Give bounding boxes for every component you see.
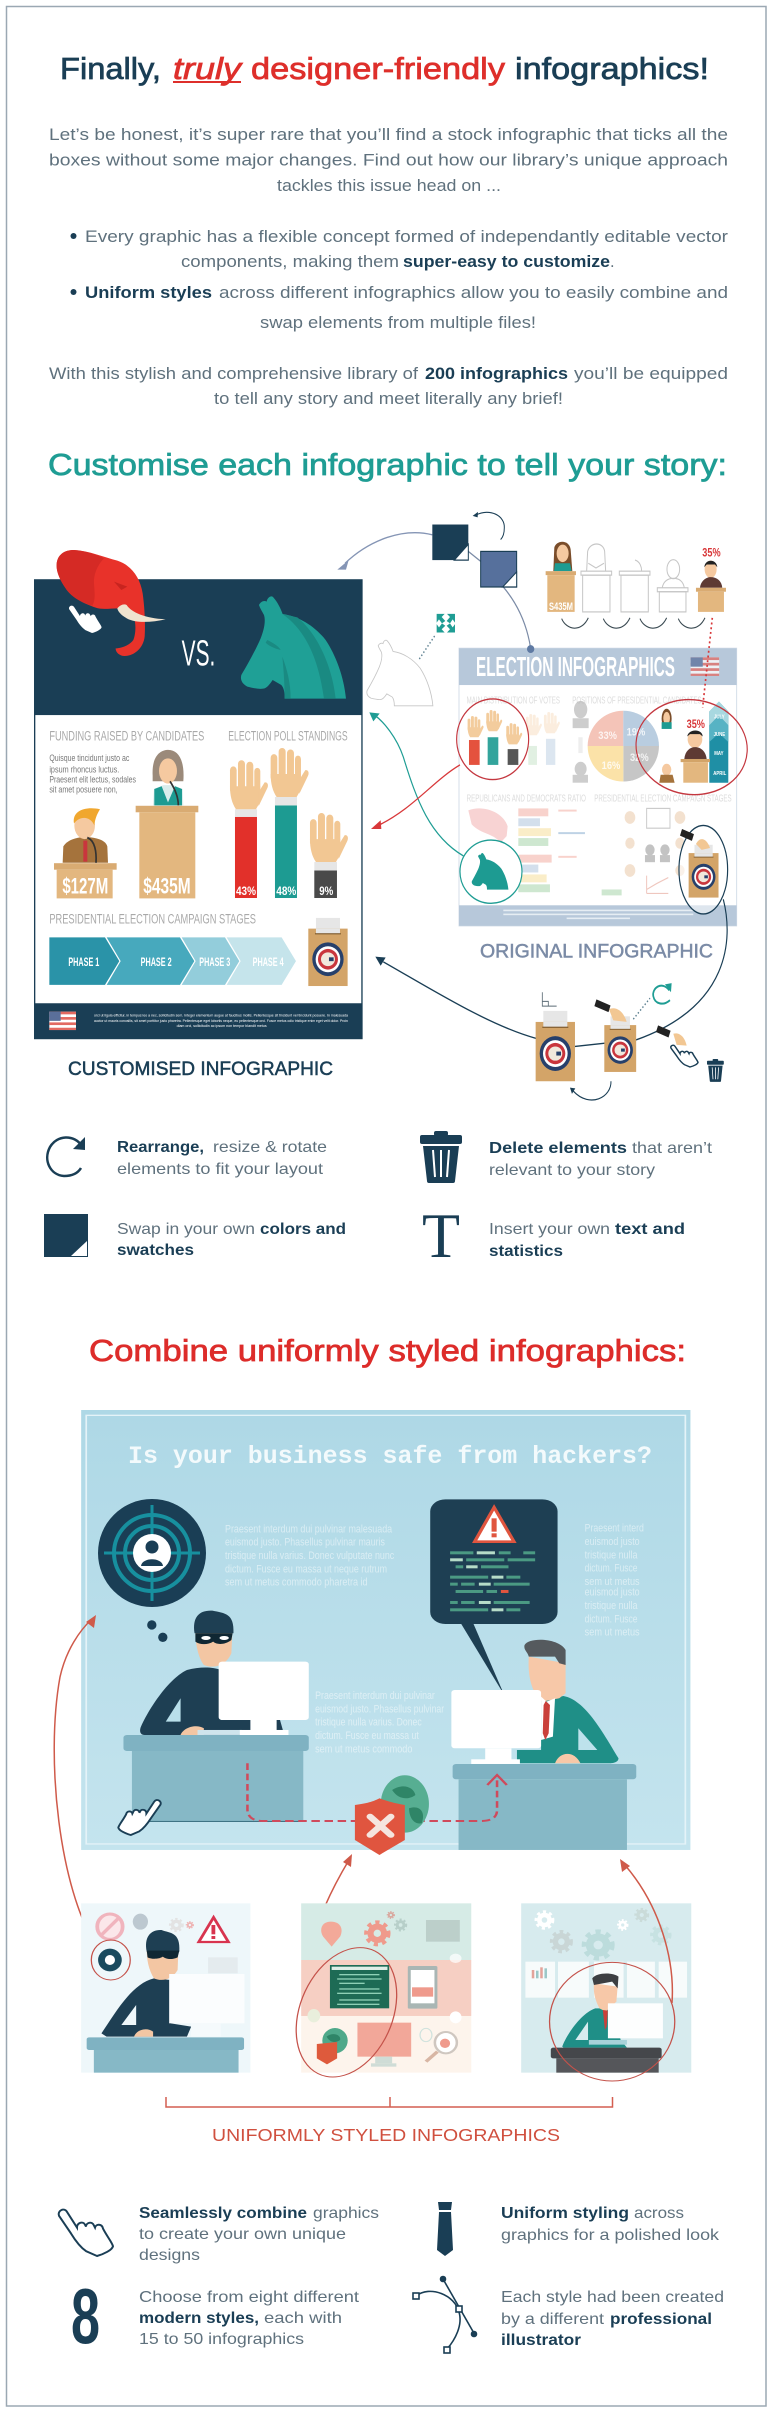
feature: uniform styling: across (634, 2205, 684, 2222)
poll hand: 43% (230, 760, 268, 898)
globe (381, 1775, 429, 1833)
label: customised infographic: CUSTOMISED INFOGRAPHIC (68, 1059, 333, 1080)
placeholder copy right (585, 1522, 644, 1638)
closing paragraph (49, 365, 728, 408)
phase arrows (49, 937, 296, 985)
placeholder copy right: dictum. Fusce (585, 1613, 638, 1625)
speech bubble (430, 1499, 558, 1695)
footer band (34, 1003, 362, 1039)
feature: combine (59, 2205, 379, 2264)
feature: text (422, 1200, 685, 1271)
feature: combine: graphics (313, 2205, 379, 2222)
podium row: S435M (549, 601, 573, 613)
placeholder copy left: Praesent interdum dui pulvinar malesuada (225, 1523, 392, 1535)
hacker desk (123, 1735, 309, 1822)
feature: combine: to create your own unique (139, 2226, 346, 2243)
feature: delete: relevant to your story (489, 1162, 655, 1179)
phase arrows: PHASE 4 (253, 957, 284, 969)
arrow: shield (305, 1854, 352, 1980)
thumbnail: security style (280, 1903, 471, 2085)
body copy: Quisque tincidunt justo ac (49, 752, 130, 763)
panel: original infographic: 33% (598, 731, 617, 742)
arrow: horse (369, 712, 463, 856)
arrow: target (54, 1615, 96, 1945)
icon: pointer on ballot (671, 1045, 698, 1067)
feature: delete (420, 1131, 713, 1183)
feature: swatches: Swap in your own (117, 1221, 255, 1238)
panel: original infographic: 19% (627, 727, 645, 739)
panel: original infographic: MAY (714, 751, 724, 757)
feature: illustrators (413, 2276, 724, 2353)
businessman desk (453, 1764, 636, 1850)
feature: delete: that aren’t (632, 1140, 713, 1157)
ballot boxes (536, 992, 687, 1081)
podium row: 35% (702, 547, 721, 560)
footer band: orci ut ligula efficitur, in tempus leo a nec, sollicitudin sem. Integer elementum augue at faucibus mollis. Pellentesque sit tincidunt vel tincidunt posuere. In malesuada (94, 1013, 348, 1018)
icon: trash (420, 1131, 462, 1183)
feature: uniform styling: graphics for a polished look (501, 2227, 720, 2244)
shield (355, 1798, 405, 1855)
label: original infographic: ORIGINAL INFOGRAPHIC (480, 942, 713, 962)
feature: combine: Seamlessly combine (139, 2205, 307, 2222)
placeholder copy middle (315, 1689, 444, 1755)
heading: customise: Customise each infographic to tell your story: (48, 447, 727, 482)
feature: illustrators: by a different (501, 2311, 605, 2328)
icon: small trash (707, 1059, 724, 1082)
intro paragraph: Let’s be honest, it’s super rare that you’ll find a stock infographic that ticks all the (49, 126, 728, 144)
placeholder copy left: euismod justo. Phasellus pulvinar mauris (225, 1536, 385, 1548)
swatch: navy (432, 525, 468, 560)
bullet list: Uniform styles (85, 284, 212, 302)
closing paragraph: to tell any story and meet literally any brief! (214, 390, 563, 408)
feature: swatches: colors and (260, 1221, 346, 1238)
panel: original infographic: JUNE (714, 732, 725, 738)
icon: rotate (47, 1137, 85, 1176)
placeholder copy right: euismod justo (585, 1586, 640, 1598)
bullet list: super-easy to customize (403, 253, 610, 271)
body copy (49, 752, 136, 795)
poll hand: 48% (271, 748, 309, 898)
intro paragraph: boxes without some major changes. Find out how our library’s unique approach (49, 152, 728, 170)
placeholder copy middle: Praesent interdum dui pulvinar (315, 1689, 435, 1702)
panel: original infographic: MAIN DISTRIBUTION OF VOTES (467, 695, 560, 707)
horse outline (367, 640, 433, 706)
icon: teal rotate (633, 983, 672, 1019)
feature: eight styles (71, 2272, 360, 2360)
candidate: woman on podium: $435M (143, 874, 191, 899)
businessman figure (517, 1640, 618, 1763)
feature: text: text and (615, 1221, 685, 1238)
placeholder copy right: tristique nulla (585, 1549, 638, 1561)
dotted red line (703, 618, 712, 708)
footer band: auctor ut mauris convallis, sit amet porttitor justo pharetra. Pellentesque eget lobortis neque, eu pellentesque orci. Fusce metus odio tristique enim eget velit dolor. Proin (94, 1019, 348, 1023)
connector: swatches to original (468, 551, 534, 653)
placeholder copy right: sem ut metus (585, 1575, 640, 1588)
placeholder copy right: sem ut metus (585, 1626, 640, 1638)
poll hand: 43%: 43% (236, 885, 256, 898)
bullet list: components, making them (181, 253, 399, 271)
heading: combine: Combine uniformly styled infographics: (89, 1333, 686, 1368)
intro paragraph (49, 126, 728, 195)
placeholder copy left: tristique nulla varius. Donec vulputate nunc (225, 1549, 394, 1562)
panel: customised infographic (34, 580, 362, 1039)
feature: delete: Delete elements (489, 1140, 627, 1157)
hacker monitor (219, 1662, 309, 1735)
feature: rearrange (47, 1137, 327, 1178)
bullet list: . (610, 253, 615, 271)
title: Finally, (60, 51, 161, 86)
footer band: diam orci, sollicitudin ac ipsum non tempor blandit metus (177, 1024, 267, 1028)
icon: letter T: T (422, 1200, 460, 1271)
elephant (57, 550, 166, 656)
arrow: swatch to customised (337, 533, 432, 570)
feature: combine: designs (139, 2247, 200, 2264)
swatch: blue (481, 551, 517, 587)
scene title: Is your business safe from hackers? (128, 1442, 652, 1471)
icon: target (98, 1499, 206, 1607)
elements and arrows around the original infographic (337, 512, 750, 1100)
panel: original infographic: POSITIONS OF PRESIDENTIAL CANDIDATES (572, 695, 702, 707)
thought dots (147, 1620, 167, 1642)
feature: uniform styling (437, 2202, 720, 2256)
title: infographics! (515, 51, 709, 86)
pointer hand on elephant (69, 606, 102, 633)
candidate: man on podium (54, 808, 117, 899)
feature: illustrators: professional (610, 2311, 712, 2328)
thumbnail: hacker style (81, 1903, 250, 2073)
placeholder copy right: euismod justo (585, 1535, 640, 1548)
feature: eight styles: 15 to 50 infographics (139, 2331, 304, 2348)
closing paragraph: With this stylish and comprehensive library of (49, 365, 418, 383)
rotate arc (473, 512, 504, 540)
podium row (546, 542, 726, 628)
horse (241, 596, 346, 699)
callout: candidate circle (633, 695, 750, 799)
bullet list: Every graphic has a flexible concept formed of independantly editable vector (85, 228, 729, 246)
chart heading: poll: ELECTION POLL STANDINGS (228, 729, 348, 744)
icon: pointer in scene (118, 1800, 161, 1835)
title (60, 51, 709, 86)
placeholder copy middle: euismod justo. Phasellus pulvinar (315, 1703, 444, 1715)
body copy: sit amet posuere non, (49, 784, 118, 795)
title: truly (173, 51, 244, 86)
feature: eight styles: Choose from eight different (139, 2289, 360, 2306)
icon: number 8: 8 (71, 2272, 100, 2360)
phase arrows: PHASE 2 (141, 957, 172, 969)
feature: rearrange: resize & rotate (213, 1139, 327, 1156)
icon: swatch (44, 1214, 88, 1257)
businessman monitor (451, 1690, 541, 1764)
chart heading: stages: PRESIDENTIAL ELECTION CAMPAIGN STAGES (49, 912, 256, 926)
feature: illustrators: illustrator (501, 2332, 581, 2349)
feature: rearrange: Rearrange, (117, 1139, 204, 1156)
panel: original infographic: JULY (714, 714, 725, 721)
callout: hands circle (457, 699, 529, 780)
feature: rearrange: elements to fit your layout (117, 1161, 324, 1178)
icon: tie (437, 2202, 453, 2256)
placeholder copy left: dictum. Fusce eu massa ut neque rutrum (225, 1563, 387, 1575)
candidate: woman on podium (136, 750, 198, 899)
feature: eight styles: modern styles, (139, 2310, 259, 2327)
VS label: VS. (182, 634, 215, 674)
feature: text: Insert your own (489, 1221, 610, 1238)
panel: original infographic: 32% (630, 752, 649, 764)
placeholder copy middle: tristique nulla varius. Donec (315, 1716, 422, 1728)
intro paragraph: tackles this issue head on ... (277, 177, 501, 195)
thumbnail: business style (521, 1903, 691, 2081)
panel: original infographic: 16% (602, 760, 620, 772)
bullet list: swap elements from multiple files! (260, 314, 536, 332)
placeholder copy left: sem ut metus commodo pharetra id (225, 1576, 368, 1588)
placeholder copy middle: sem ut metus commodo (315, 1743, 413, 1755)
label: uniformly styled: UNIFORMLY STYLED INFOGRAPHICS (212, 2125, 560, 2145)
hacking path (247, 1763, 507, 1821)
phase arrows: PHASE 3 (199, 957, 230, 969)
panel: hackers scene (81, 1410, 690, 1855)
hacker figure (140, 1611, 284, 1735)
arrow: ballot (375, 899, 727, 1046)
thumbnails (81, 1903, 691, 2085)
poll hand: 9%: 9% (319, 885, 333, 898)
rotate arc below boxes (570, 1081, 611, 1100)
placeholder copy middle: dictum. Fusce eu massa ut (315, 1729, 419, 1742)
placeholder copy right: tristique nulla (585, 1599, 638, 1612)
title: designer-friendly (251, 51, 506, 86)
bullet list (70, 228, 729, 332)
body copy: Praesent elit lectus, sodales (49, 774, 136, 785)
feature: uniform styling: Uniform styling (501, 2205, 629, 2222)
panel: original infographic: 35% (687, 718, 705, 731)
header band (34, 580, 362, 715)
candidate: man on podium: $127M (62, 874, 108, 899)
callout: horse circle (460, 840, 522, 903)
icon: bezier (413, 2276, 476, 2353)
chart heading: funding: FUNDING RAISED BY CANDIDATES (49, 729, 204, 744)
callout: ballot circle (679, 825, 728, 914)
poll hand: 48%: 48% (276, 885, 296, 898)
feature: swatches: swatches (117, 1242, 194, 1259)
body copy: ipsum rhoncus luctus. (49, 764, 119, 775)
feature: swatches (44, 1214, 346, 1259)
arrow: hands (371, 765, 460, 829)
placeholder copy left (225, 1523, 394, 1588)
bullet list: across different infographics allow you to easily combine and (219, 284, 728, 302)
ballot box (308, 918, 348, 986)
placeholder copy right: Praesent interd (585, 1522, 644, 1534)
dotted teal line (419, 634, 436, 659)
placeholder copy right: dictum. Fusce (585, 1562, 638, 1574)
arrow: businessman (620, 1859, 672, 2003)
bracket (166, 2097, 612, 2107)
poll hand: 9% (310, 813, 348, 898)
closing paragraph: 200 infographics (425, 365, 568, 383)
closing paragraph: you’ll be equipped (574, 365, 728, 383)
phase arrows: PHASE 1 (68, 957, 100, 969)
feature: eight styles: each with (264, 2310, 342, 2327)
icon: pointer (59, 2210, 113, 2256)
panel: original infographic: APRIL (713, 771, 726, 777)
panel: original infographic (459, 648, 737, 926)
feature: text: statistics (489, 1243, 563, 1260)
panel: original infographic: REPUBLICANS AND DEMOCRATS RATIO (467, 793, 586, 805)
icon: expand (437, 614, 455, 632)
feature: illustrators: Each style had been created (501, 2289, 724, 2306)
